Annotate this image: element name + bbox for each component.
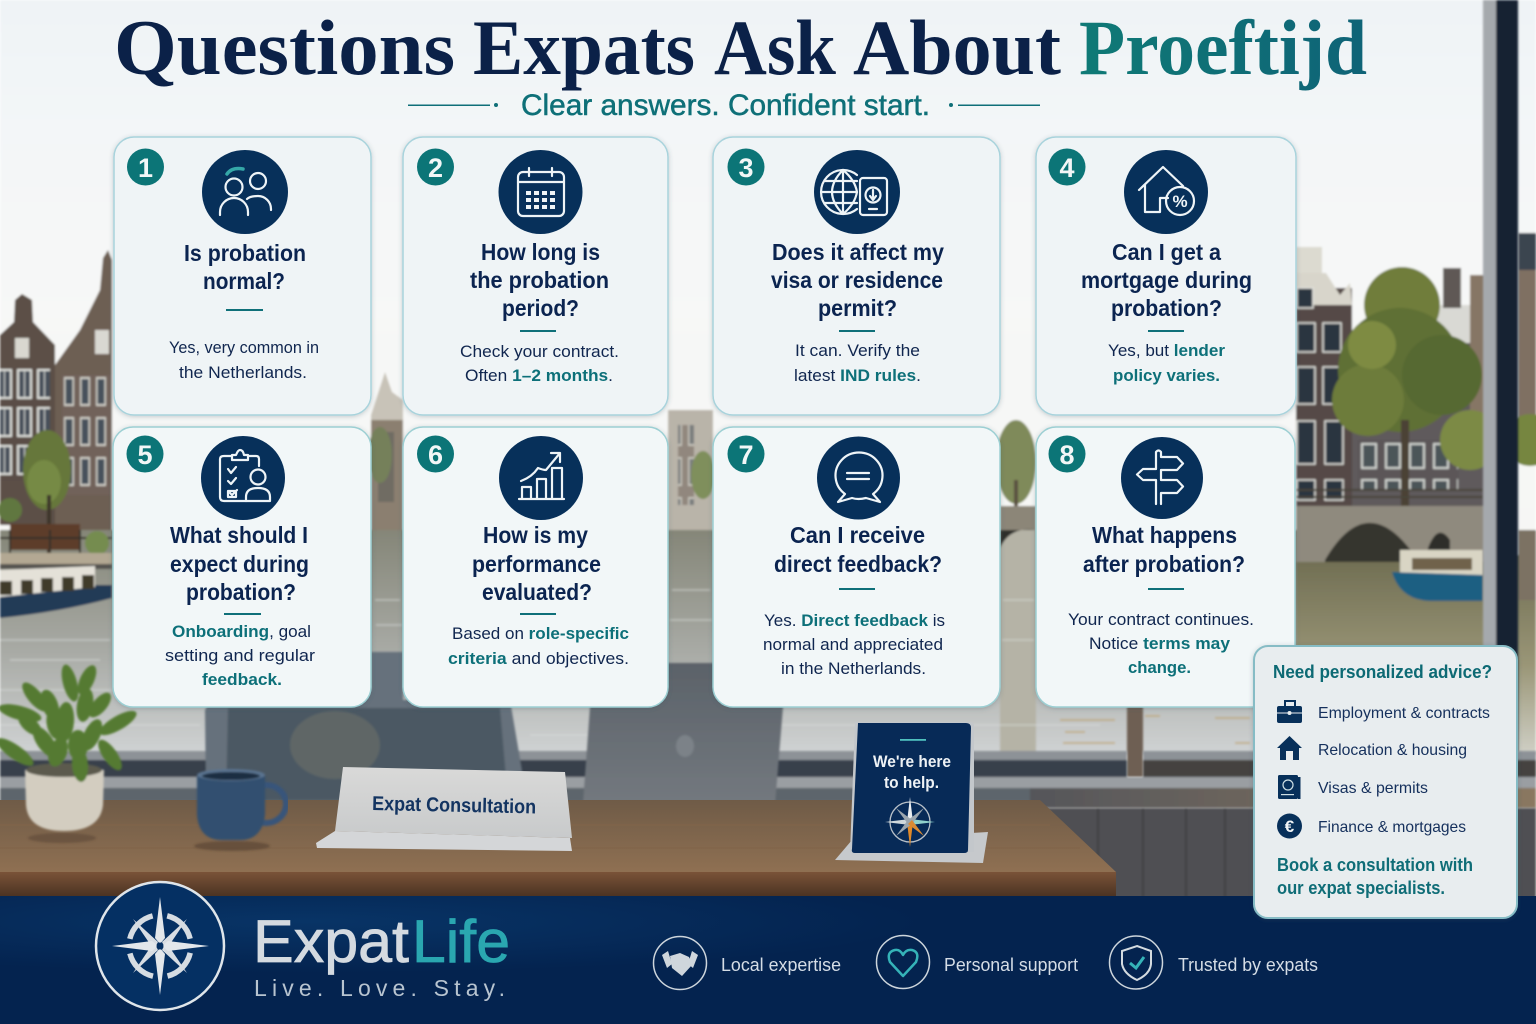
tagline: Live. Love. Stay. [254,975,505,1001]
title [114,4,1367,91]
plant in pot [0,663,140,843]
office chair [205,652,527,800]
question 2 [470,239,609,321]
question 1 [184,240,306,294]
trust item: local expertise [654,936,841,990]
tablet compass icon [885,797,935,847]
badge 2 [417,148,454,186]
call to action [1277,855,1473,898]
coffee mug [194,769,286,851]
boat left [0,566,112,618]
answer 7: in the Netherlands. [781,659,926,678]
boat right [1392,550,1483,601]
water [0,530,1300,755]
list item: employment: Employment & contracts [1318,705,1490,722]
panel heading: Need personalized advice? [1273,662,1492,682]
icon: globe and passport [814,150,900,234]
question 8: What happens [1092,522,1237,548]
question 7 [774,522,942,577]
badge 1 [127,148,164,186]
brand name: Life [412,908,510,975]
answer 4: Yes, but lender [1108,341,1225,360]
question 4: probation? [1111,295,1222,321]
icon: rising bar chart [499,436,583,520]
brand name: Expat [253,908,409,975]
icon: house [1277,736,1302,760]
question 3 [771,239,944,321]
answer 1 [169,338,319,382]
answer 6: Based on role-specific [452,624,629,643]
nameplate text: Expat Consultation [372,793,536,818]
badge 6: 6 [428,440,443,470]
title: Questions [114,4,455,91]
answer 8 [1068,610,1254,677]
trust item: local expertise: Local expertise [721,955,841,975]
question 3: visa or residence [771,267,943,293]
nameplate: Expat Consultation [316,767,572,851]
question 7: Can I receive [790,522,925,548]
list item: finance: Finance & mortgages [1318,819,1466,836]
window frame post [1127,0,1518,777]
badge 8 [1048,436,1086,472]
badge 6 [417,436,454,472]
icon: speech bubble [817,436,900,520]
question 8: after probation? [1083,551,1245,577]
badge 3: 3 [738,153,754,183]
left houses [0,250,112,569]
list item: relocation: Relocation & housing [1318,742,1467,759]
tablet sign [835,722,988,863]
icon: checklist and person [201,436,285,520]
icon: euro [1277,814,1302,838]
badge 3 [728,148,764,186]
badge 7: 7 [738,440,754,470]
trust item: personal support: Personal support [944,955,1078,975]
call to action: our expat specialists. [1277,878,1445,898]
question 5 [170,522,309,605]
question 1: Is probation [184,240,306,266]
answer 1: Yes, very common in [169,338,319,357]
answer 3 [794,341,921,385]
panel: personalized advice [1254,646,1517,918]
wall panel below window [1030,808,1536,900]
question 2: the probation [470,267,609,293]
card 7 [713,427,1000,707]
question 6: How is my [483,522,588,548]
question 4 [1081,239,1252,321]
card 5 [113,427,371,707]
title: Ask [714,4,837,91]
laptop [568,663,788,832]
question 8 [1083,522,1245,577]
question 2: period? [502,295,579,321]
desk [0,800,1116,897]
card 1 [114,137,371,415]
answer 7: normal and appreciated [763,635,943,654]
icon: euro: € [1285,817,1295,836]
answer 4: policy varies. [1113,366,1220,385]
icon: handshake [662,951,698,976]
question 6 [472,522,601,605]
answer 7: Yes. Direct feedback is [764,611,945,630]
subtitle: Clear answers. Confident start. [521,89,930,122]
answer 6 [448,624,629,668]
badge 1: 1 [138,153,153,183]
answer 5: setting and regular [165,646,315,665]
question 4: Can I get a [1112,239,1221,265]
brand name [253,908,510,975]
title: Proeftijd [1079,4,1367,91]
icon: house with percent: % [1172,192,1188,211]
gold water flecks [1060,716,1250,743]
call to action: Book a consultation with [1277,855,1473,875]
tablet sign: to help. [884,773,939,792]
question 6: performance [472,551,601,577]
answer 6: criteria and objectives. [448,649,629,668]
question 5: What should I [170,522,308,548]
icon: calendar [498,150,582,234]
answer 2 [460,342,619,385]
answer 2: Often 1–2 months. [465,366,613,385]
question 2: How long is [481,239,600,265]
card 8 [1036,427,1295,707]
water ripples [0,590,1100,735]
question 5: expect during [170,551,309,577]
question 6: evaluated? [482,579,592,605]
answer 3: latest IND rules. [794,366,921,385]
answer 3: It can. Verify the [795,341,920,360]
title: About [853,4,1061,91]
icon: heart [889,950,917,976]
window sill [0,751,1536,808]
card 2 [403,137,668,415]
answer 7 [763,611,945,678]
question 3: Does it affect my [772,239,944,265]
answer 8: Notice terms may [1089,634,1231,653]
badge 5: 5 [137,440,153,470]
badge 4 [1048,148,1086,186]
icon: people [202,150,288,234]
answer 5: Onboarding, goal [172,622,311,641]
card 6 [403,427,668,707]
tree right [1332,267,1536,508]
answer 1: the Netherlands. [179,363,307,382]
question 3: permit? [818,295,897,321]
icon: signpost [1121,437,1203,519]
badge 2: 2 [428,153,443,183]
answer 8: Your contract continues. [1068,610,1254,629]
answer 5: feedback. [202,670,282,689]
title: Expats [473,4,695,91]
trust item: trusted by expats: Trusted by expats [1178,955,1318,975]
card 4 [1036,137,1296,415]
distant canal houses [368,372,1036,540]
answer 2: Check your contract. [460,342,619,361]
question 4: mortgage during [1081,267,1252,293]
footer band [0,896,1536,1024]
answer 8: change. [1128,658,1191,677]
icon: passport [1278,775,1300,799]
icon: house with percent [1124,150,1208,234]
tablet text: We're here [873,752,951,771]
card 3 [713,137,1000,415]
stone bridge center [1000,506,1036,548]
trust item: trusted by expats [1110,936,1318,989]
trust item: personal support [876,936,1078,988]
badge 7 [728,436,764,472]
question 1: normal? [203,268,285,294]
subtitle [408,89,1040,122]
answer 4 [1108,341,1225,385]
badge 8: 8 [1059,440,1075,470]
question 5: probation? [186,579,296,605]
question 7: direct feedback? [774,551,942,577]
list item: visas: Visas & permits [1318,780,1428,797]
icon: briefcase [1277,701,1302,723]
logo: compass emblem [96,882,224,1010]
right houses [1296,233,1536,510]
badge 4: 4 [1059,153,1075,183]
bridge right [1296,490,1536,600]
answer 5 [165,622,315,689]
badge 5 [126,436,164,472]
icon: shield [1122,946,1151,980]
